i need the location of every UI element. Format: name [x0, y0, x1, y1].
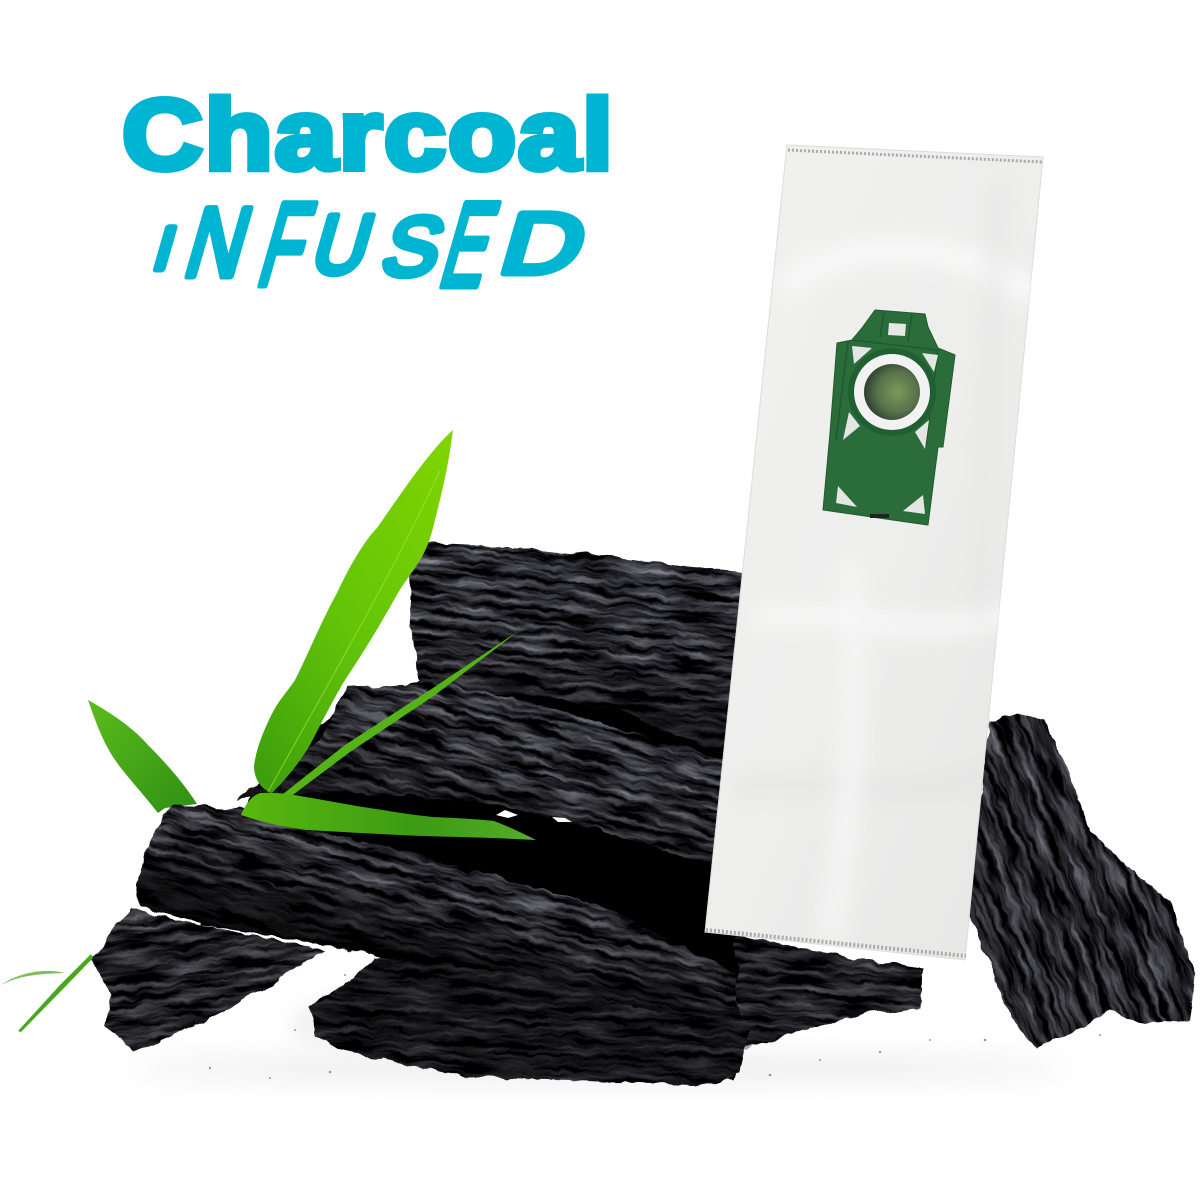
charcoal log: lower centre [308, 958, 750, 1086]
white gaps showing through the pile [496, 810, 572, 822]
subtitle: INFUSED: N [175, 189, 263, 298]
collar ring [848, 348, 936, 436]
charcoal pile [92, 541, 1196, 1086]
big bamboo leaf [254, 430, 453, 793]
thin bamboo stem [283, 630, 520, 797]
subtitle: INFUSED: F [247, 179, 326, 311]
bag top stitching [788, 150, 1042, 162]
dark mass behind logs [200, 665, 745, 1080]
collar windows: corner cut-outs [836, 346, 938, 518]
charcoal log: lower right [732, 936, 924, 1050]
dark gap between logs [250, 785, 738, 975]
green bag collar [823, 310, 955, 525]
bag folds [795, 245, 1032, 634]
left leaf [88, 700, 197, 813]
subtitle: INFUSED: E [428, 179, 511, 312]
subtitle: INFUSED: S [373, 200, 455, 293]
charcoal log: middle [236, 680, 722, 862]
charcoal log: front [136, 804, 738, 1013]
vacuum bag [705, 145, 1043, 960]
subtitle: INFUSED [147, 179, 598, 312]
charcoal log: lower left [92, 908, 326, 1052]
charcoal log: top back [409, 541, 742, 754]
collar ridges [836, 312, 938, 445]
lower-left grass blade [1, 971, 65, 985]
subtitle: INFUSED: U [303, 199, 383, 292]
subtitle: INFUSED: D [491, 196, 598, 292]
title: Charcoal: Charcoal [122, 80, 615, 191]
floor shadow with charcoal dust [130, 974, 1101, 1082]
subtitle: INFUSED: I [147, 215, 183, 282]
charcoal log: right [970, 714, 1196, 1048]
lower bamboo leaf [241, 793, 536, 840]
lower-left grass stem [18, 954, 93, 1032]
collar window: top square [888, 323, 906, 336]
bag bottom stitching [706, 930, 966, 956]
